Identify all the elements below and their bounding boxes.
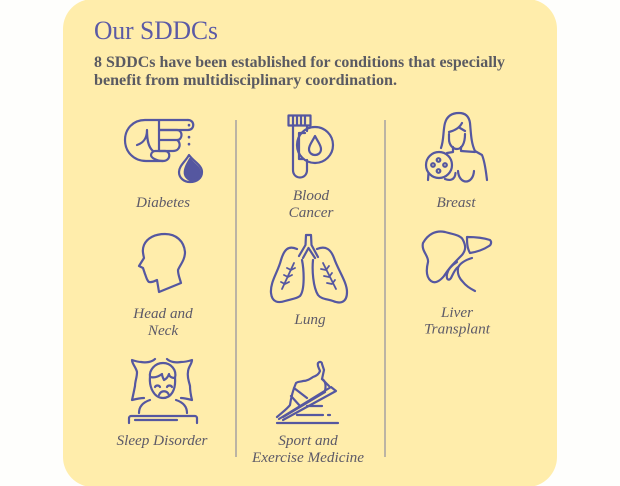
label: Head and Neck: Head and	[133, 305, 193, 322]
icon: lungs	[271, 235, 347, 302]
label: Lung: Lung	[293, 311, 326, 328]
label: Head and Neck: Neck	[147, 322, 178, 339]
label: Sport and Exercise Medicine: Exercise Medicine	[251, 449, 364, 466]
icon: blood cancer test tube	[288, 116, 333, 178]
label: Breast: Breast	[436, 194, 476, 211]
icon: head profile	[139, 234, 185, 292]
intro text	[94, 54, 505, 89]
card background	[63, 0, 557, 486]
label: Blood Cancer: Blood	[293, 187, 329, 204]
icon: sport shoe	[277, 362, 338, 423]
label: Diabetes: Diabetes	[135, 194, 190, 211]
icon: liver	[423, 231, 491, 291]
intro text: benefit from multidisciplinary coordination.	[94, 72, 397, 89]
label: Liver Transplant: Liver	[441, 304, 473, 321]
icon: breast	[426, 113, 487, 182]
icon: sleep disorder	[129, 359, 197, 423]
label: Liver Transplant: Transplant	[424, 320, 491, 338]
label: Sleep Disorder: Sleep Disorder	[117, 432, 208, 449]
intro text: 8 SDDCs have been established for conditions that especially	[94, 54, 505, 71]
icon: diabetes hand and blood drop	[125, 120, 202, 182]
title: Our SDDCs	[94, 16, 218, 45]
label: Sport and Exercise Medicine: Sport and	[278, 432, 338, 449]
label: Blood Cancer: Cancer	[289, 204, 333, 221]
